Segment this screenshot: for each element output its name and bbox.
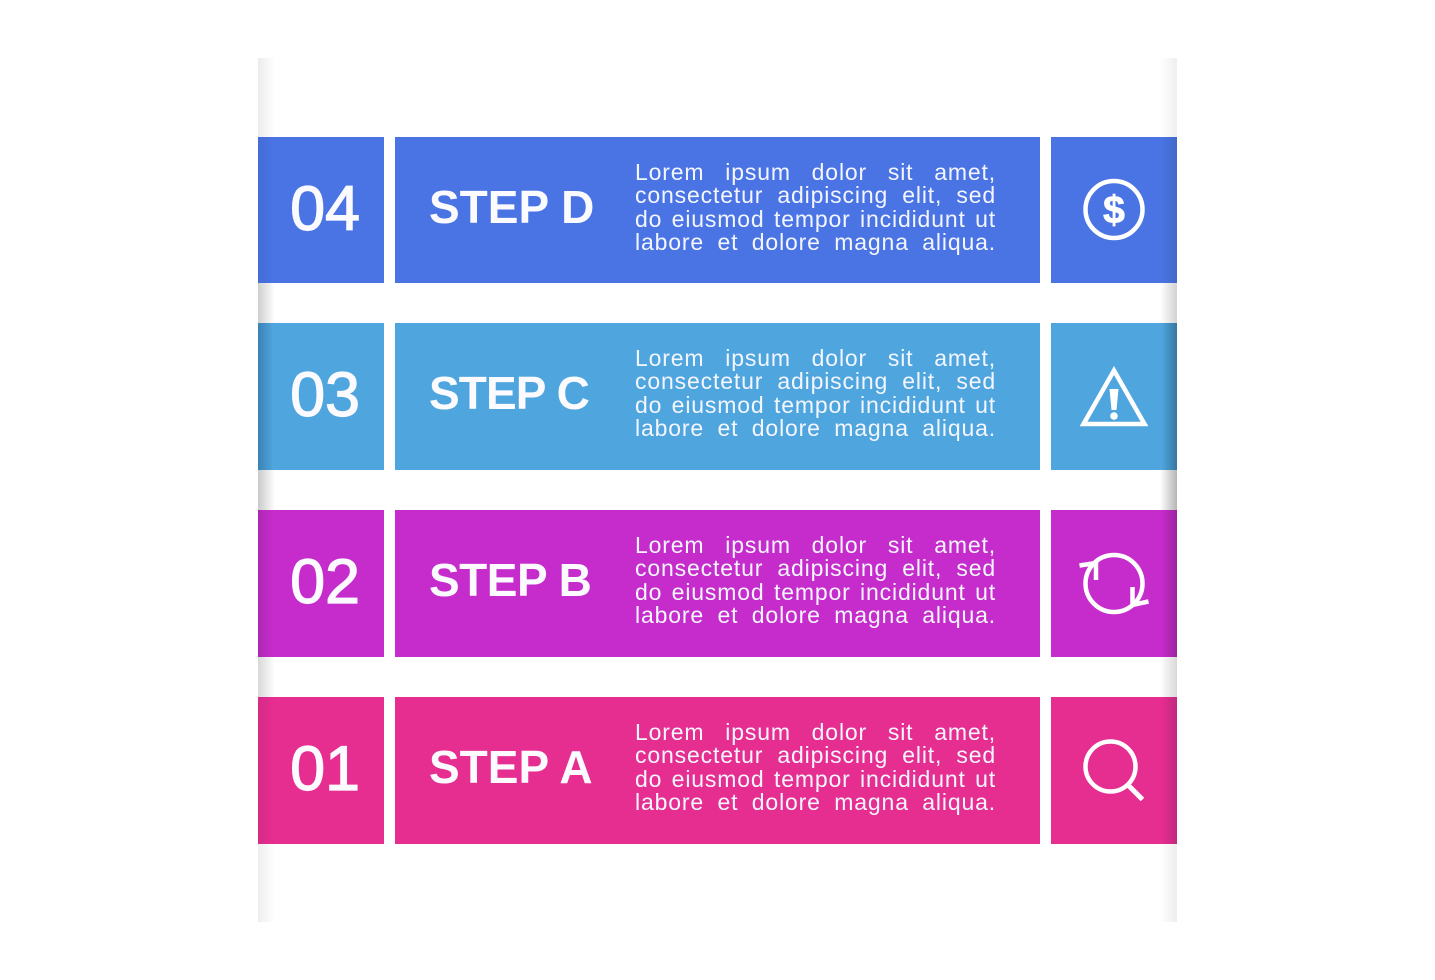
main panel step B — [395, 510, 1040, 657]
icon panel: cycle — [1051, 510, 1177, 657]
right page-edge shadow — [1162, 58, 1177, 922]
main panel step B: labore et dolore magna aliqua. — [635, 602, 996, 628]
main panel step D: do eiusmod tempor incididunt ut — [635, 206, 996, 232]
main panel step A — [395, 697, 1040, 844]
icon panel: magnifier — [1051, 697, 1177, 844]
icon panel: warning — [1051, 323, 1177, 470]
row: step A — [258, 697, 1177, 844]
main panel step B: consectetur adipiscing elit, sed — [635, 555, 996, 581]
number panel 01: 01 — [290, 734, 360, 804]
left page-edge shadow — [258, 58, 272, 922]
number panel 03 — [258, 323, 384, 470]
icon panel: dollar — [1051, 137, 1177, 283]
main panel step C: labore et dolore magna aliqua. — [635, 415, 996, 441]
main panel step D: labore et dolore magna aliqua. — [635, 229, 996, 255]
row: step D — [258, 137, 1177, 283]
main panel step C: consectetur adipiscing elit, sed — [635, 368, 996, 394]
main panel step B: Lorem ipsum dolor sit amet, — [635, 532, 996, 558]
number panel 02 — [258, 510, 384, 657]
main panel step D: consectetur adipiscing elit, sed — [635, 182, 996, 208]
number panel 01 — [258, 697, 384, 844]
main panel step A: Lorem ipsum dolor sit amet, — [635, 719, 996, 745]
main panel step B: STEP B — [429, 554, 591, 606]
main panel step D: STEP D — [429, 181, 594, 233]
main panel step B: do eiusmod tempor incididunt ut — [635, 579, 996, 605]
number panel 04 — [258, 137, 384, 283]
row: step B — [258, 510, 1177, 657]
number panel 02: 02 — [290, 547, 360, 617]
main panel step D: Lorem ipsum dolor sit amet, — [635, 159, 996, 185]
number panel 04: 04 — [290, 174, 360, 244]
row: step C — [258, 323, 1177, 470]
main panel step C: STEP C — [429, 367, 589, 419]
number panel 03: 03 — [290, 360, 360, 430]
icon panel: dollar: $ — [1103, 189, 1125, 232]
main panel step A: STEP A — [429, 741, 593, 793]
main panel step C: Lorem ipsum dolor sit amet, — [635, 345, 996, 371]
main panel step C: do eiusmod tempor incididunt ut — [635, 392, 996, 418]
main panel step A: do eiusmod tempor incididunt ut — [635, 766, 996, 792]
main panel step A: consectetur adipiscing elit, sed — [635, 742, 996, 768]
main panel step C — [395, 323, 1040, 470]
main panel step A: labore et dolore magna aliqua. — [635, 789, 996, 815]
main panel step D — [395, 137, 1040, 283]
